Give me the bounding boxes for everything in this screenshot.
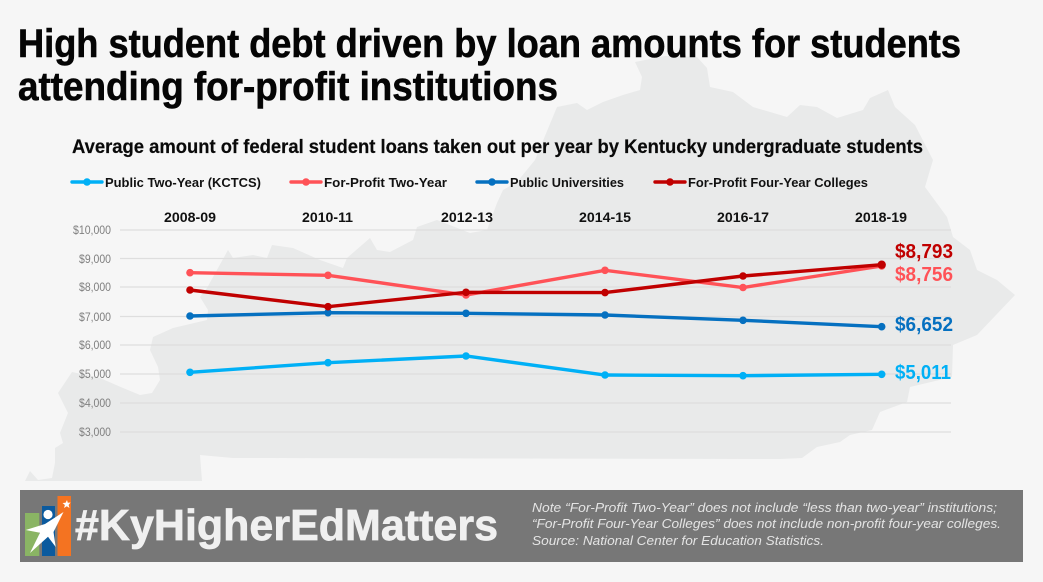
source note: [532, 501, 1001, 548]
chart subtitle: Average amount of federal student loans taken out per year by Kentucky undergraduate students: [72, 136, 923, 158]
legend item: For-Profit Two-Year: For-Profit Two-Year: [324, 176, 447, 190]
series: Public Universities: [186, 309, 885, 331]
hashtag: #KyHigherEdMatters: [75, 501, 498, 550]
title: High student debt driven by loan amounts for students: [18, 22, 961, 66]
x-axis year labels: [164, 210, 907, 225]
end value labels: [895, 241, 953, 384]
source note: Note “For-Profit Two-Year” does not include “less than two-year” institutions;: [532, 501, 998, 515]
x-axis year labels: 2008-09: [164, 210, 216, 225]
x-axis year labels: 2012-13: [441, 210, 494, 225]
x-axis year labels: 2014-15: [579, 210, 632, 225]
x-axis year labels: 2018-19: [855, 210, 907, 225]
series: For-Profit Four-Year Colleges: [186, 260, 886, 311]
x-axis year labels: 2016-17: [717, 210, 769, 225]
x-axis year labels: 2010-11: [302, 210, 353, 225]
end value labels: $8,793: [895, 241, 953, 263]
series: Public Two-Year (KCTCS): [186, 352, 885, 380]
end value labels: $5,011: [895, 362, 951, 384]
y-axis labels: $4,000: [79, 396, 111, 410]
title: [18, 22, 961, 109]
y-axis labels: $9,000: [79, 252, 111, 266]
Kentucky map silhouette background: [25, 56, 1015, 481]
source note: “For-Profit Four-Year Colleges” does not include non-profit four-year colleges.: [532, 517, 1001, 531]
end value labels: $6,652: [895, 314, 953, 336]
source note: Source: National Center for Education Statistics.: [532, 534, 824, 548]
series: For-Profit Two-Year: [186, 262, 885, 299]
line chart: [73, 210, 953, 439]
y-axis labels: $10,000: [73, 223, 111, 237]
y-axis labels: [73, 223, 111, 439]
y-axis labels: $5,000: [79, 367, 111, 381]
end value labels: $8,756: [895, 264, 953, 286]
footer band: [20, 490, 1023, 562]
y-axis labels: $8,000: [79, 280, 111, 294]
legend item: For-Profit Four-Year Colleges: For-Profit Four-Year Colleges: [688, 176, 868, 190]
y-axis labels: $6,000: [79, 338, 111, 352]
y-axis labels: $7,000: [79, 310, 111, 324]
title: attending for-profit institutions: [18, 65, 558, 109]
legend item: Public Two-Year: Public Two-Year (KCTCS): [105, 176, 261, 190]
icon: logo of bars with figure and star: [25, 496, 71, 556]
legend: [72, 176, 868, 190]
y-axis labels: $3,000: [79, 425, 111, 439]
legend item: Public Universities: Public Universities: [510, 176, 624, 190]
